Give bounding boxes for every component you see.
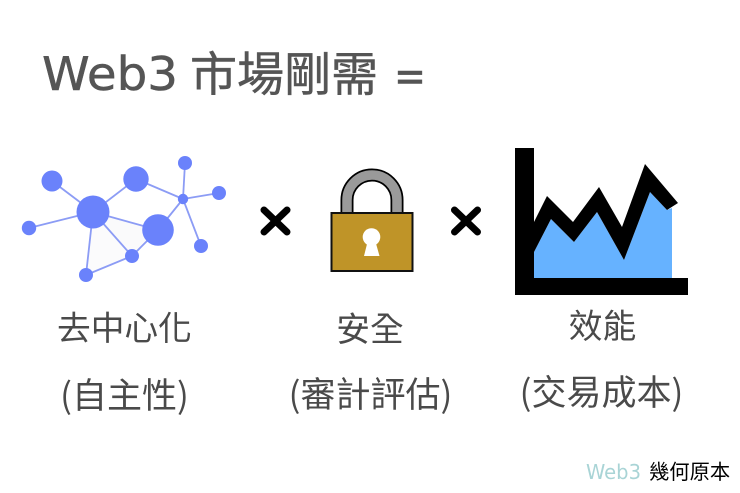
title: =: [394, 51, 426, 102]
icon: decentralized network: [22, 156, 226, 282]
footer brand: Web3: [586, 460, 641, 484]
label: performance: 效能: [569, 299, 636, 348]
footer brand: 幾何原本: [649, 455, 730, 485]
icon: multiply sign 1: [264, 210, 287, 232]
footer brand: [586, 455, 730, 485]
icon: padlock: [332, 175, 412, 271]
label: security: 安全: [336, 302, 404, 351]
label: decentralization: (自主性): [60, 368, 189, 419]
label: decentralization: [57, 301, 192, 419]
title: [42, 36, 426, 105]
icon: area chart: [515, 148, 688, 295]
icon: multiply sign 2: [454, 210, 478, 232]
label: decentralization: 去中心化: [57, 301, 192, 350]
title: Web3: [42, 47, 178, 101]
label: performance: (交易成本): [520, 365, 683, 416]
label: performance: [520, 299, 683, 416]
title: 市場剛需: [190, 36, 378, 105]
label: security: (審計評估): [289, 367, 452, 418]
label: security: [289, 302, 452, 418]
